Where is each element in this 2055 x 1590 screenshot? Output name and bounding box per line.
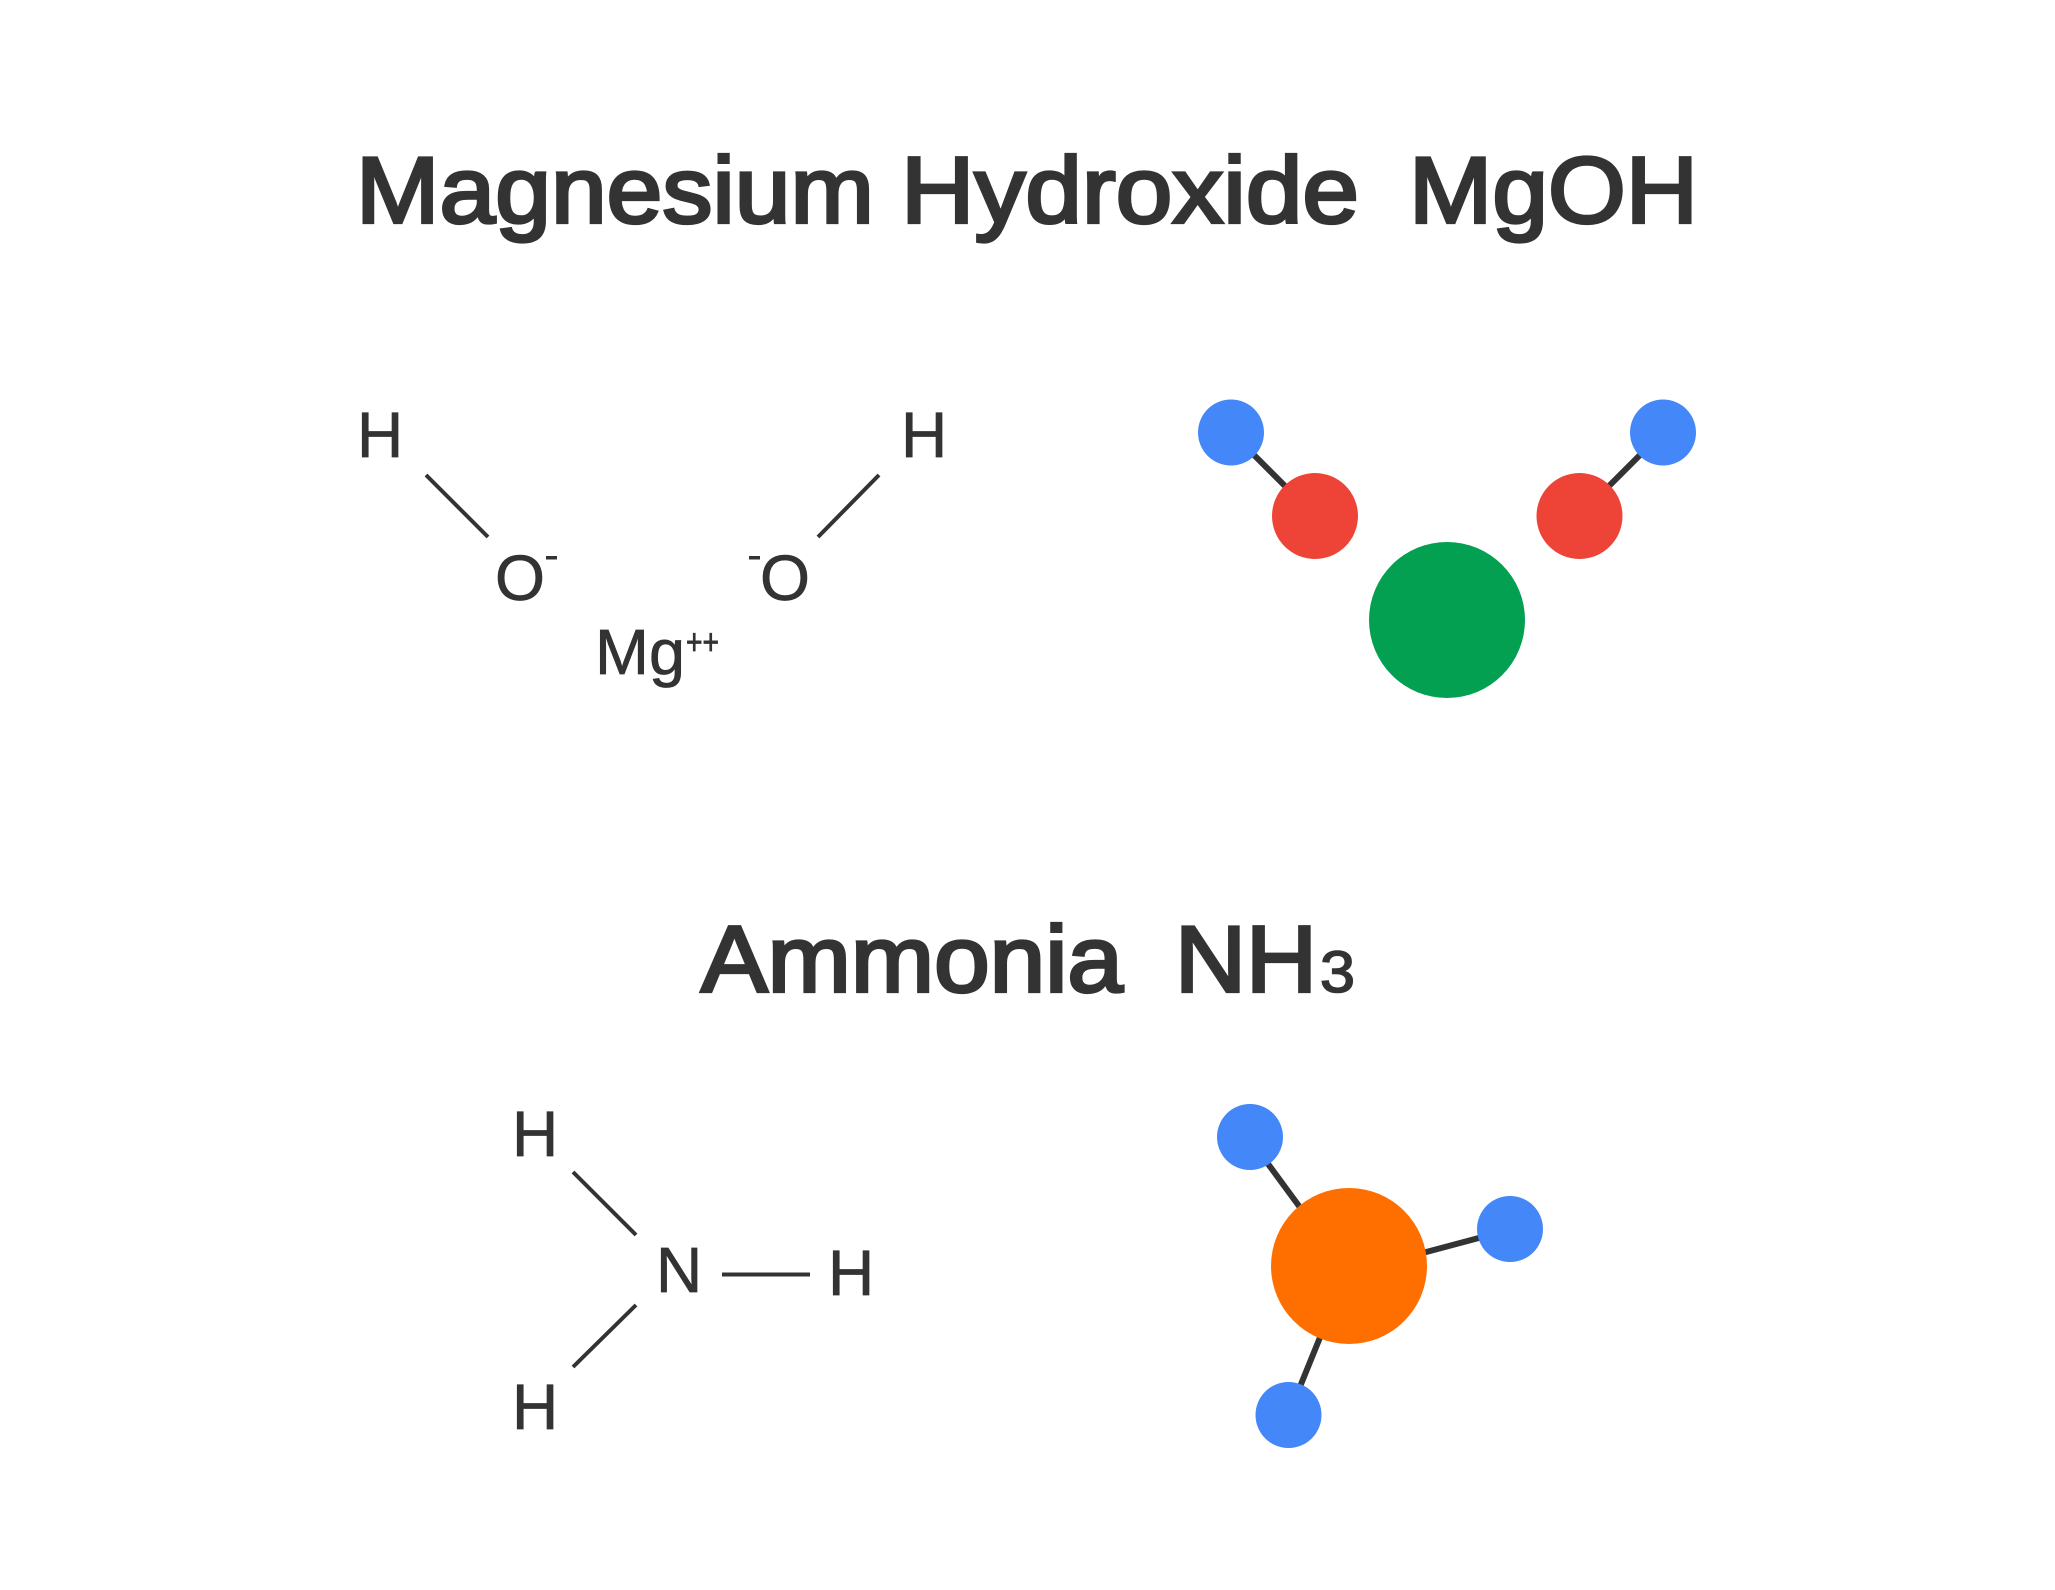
atom label: right H: H [901,399,947,471]
ion label: Mg++: Mg [595,616,685,688]
atom label: top H: H [512,1098,558,1170]
charge: right minus [749,556,760,560]
title: Ammonia NH3 [701,906,1355,1012]
atom: right hydrogen [1630,400,1696,466]
title: Magnesium Hydroxide MgOH: MgOH [1409,138,1698,242]
atom label: bottom H: H [512,1371,558,1443]
panel: magnesium hydroxide structural formula [357,399,947,688]
panel: magnesium hydroxide ball-and-stick model [1198,400,1696,698]
atom: left oxygen [1272,473,1358,559]
atom: top hydrogen [1217,1104,1283,1170]
atom: right hydrogen [1477,1196,1543,1262]
atom label: N: N [656,1234,702,1306]
panel: ammonia ball-and-stick model [1217,1104,1543,1448]
panel: ammonia structural formula [512,1098,874,1443]
title: Magnesium Hydroxide MgOH [356,138,1698,242]
atom: nitrogen [1271,1188,1427,1344]
title: Magnesium Hydroxide MgOH: Hydroxide [901,138,1359,242]
bond: right H to O [818,475,879,537]
title: Ammonia NH3: 3 [1320,940,1355,1005]
bond: N to right H [722,1272,810,1276]
charge: left minus [546,556,557,560]
bond: bottom hydrogen to nitrogen [1288,1266,1349,1415]
atom label: left O minus: O [495,542,545,614]
atom: left hydrogen [1198,400,1264,466]
title: Magnesium Hydroxide MgOH: Magnesium [356,138,874,242]
atom label: left H: H [357,399,403,471]
bond: right hydrogen to nitrogen [1415,1235,1490,1255]
ion label: Mg++: ++ [686,621,719,662]
title: Ammonia NH3: NH [1175,906,1317,1012]
atom label: right O: O [760,542,810,614]
atom: bottom hydrogen [1256,1382,1322,1448]
title: Ammonia NH3: Ammonia [701,906,1124,1012]
bond: top H to N [573,1172,636,1235]
bond: right hydrogen to oxygen [1579,432,1663,516]
bond: bottom H to N [573,1305,636,1367]
atom label: right H: H [828,1237,874,1309]
bond: left H to O [426,475,488,537]
bond: left hydrogen to oxygen [1231,432,1315,516]
bond: top hydrogen to nitrogen [1260,1153,1310,1221]
atom: right oxygen [1536,473,1622,559]
atom: magnesium [1369,542,1525,698]
